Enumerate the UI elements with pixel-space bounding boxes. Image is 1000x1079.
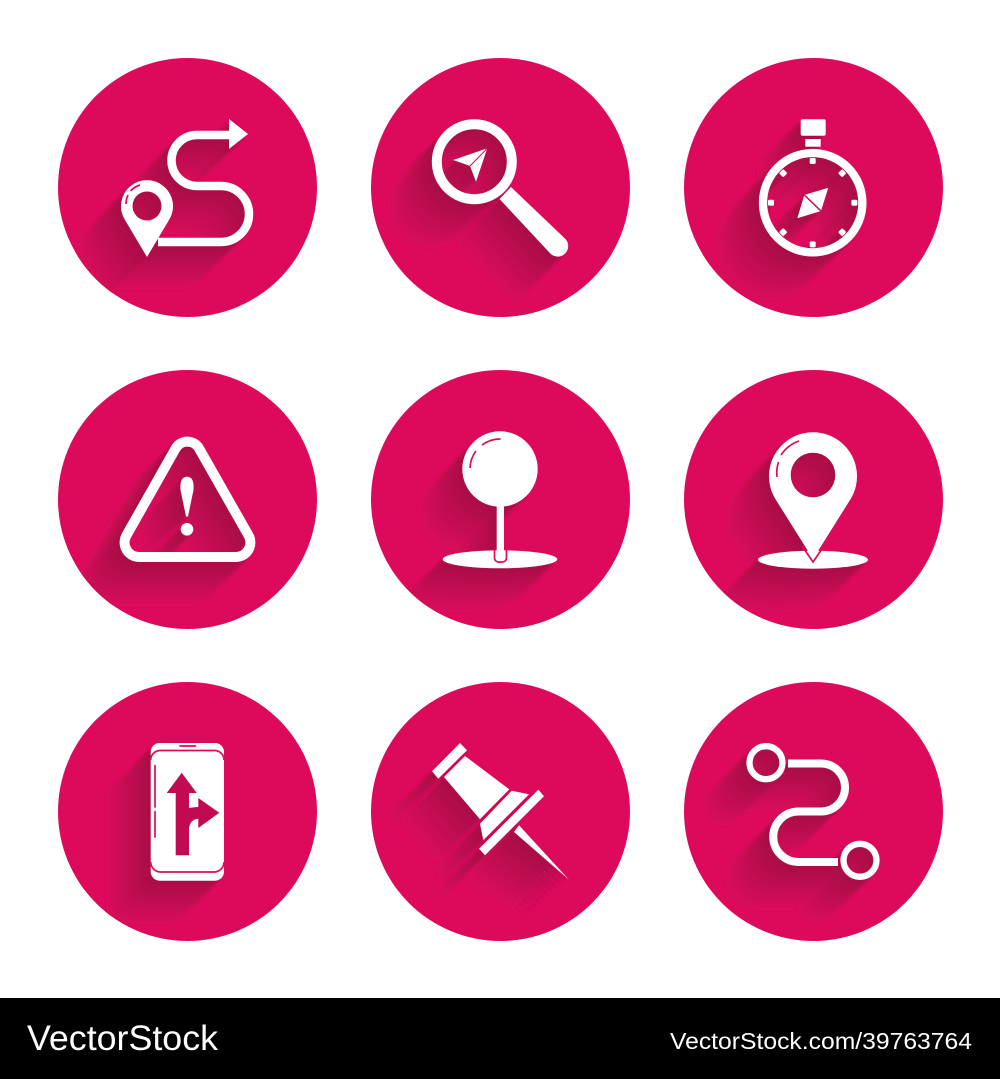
long shadow: compass <box>719 123 858 296</box>
icon: location marker on ellipse <box>758 432 868 569</box>
circle background: route <box>58 58 317 317</box>
panel: route between two points <box>684 682 943 941</box>
long shadow: thumbtack <box>394 746 566 906</box>
circle background: phone <box>58 682 317 941</box>
long shadow: round pin <box>399 435 553 612</box>
long shadow: warning <box>81 446 246 601</box>
circle background: two-point route <box>684 682 943 941</box>
icon: compass <box>763 119 862 252</box>
panel: thumbtack <box>371 682 630 941</box>
panel: warning triangle <box>58 370 317 629</box>
footer logo text: VectorStock <box>27 1019 219 1058</box>
long shadow: location <box>714 436 864 613</box>
icon: curved route with endpoints <box>750 746 876 877</box>
long shadow: magnifier <box>393 128 564 301</box>
circle background: compass <box>684 58 943 317</box>
panel: winding route with location pin <box>58 58 317 317</box>
icon: thumbtack <box>432 743 569 880</box>
long shadow: route <box>77 123 245 301</box>
panel: magnifying glass with navigation arrow <box>371 58 630 317</box>
panel: compass <box>684 58 943 317</box>
icon: round pin on ellipse <box>443 431 557 568</box>
panel: round push pin <box>371 370 630 629</box>
footer bar <box>0 998 1000 1079</box>
circle background: thumbtack <box>371 682 630 941</box>
icon: route arrow and pin <box>121 119 249 257</box>
icon: smartphone <box>151 743 224 881</box>
circle background: warning <box>58 370 317 629</box>
circle background: location <box>684 370 943 629</box>
icon: magnifying glass <box>437 124 568 257</box>
footer image reference: VectorStock.com/39763764 <box>670 1028 972 1054</box>
panel: location marker <box>684 370 943 629</box>
circle background: round pin <box>371 370 630 629</box>
circle background: magnifier <box>371 58 630 317</box>
panel: smartphone with road directions <box>58 682 317 941</box>
long shadow: two-point route <box>706 750 872 921</box>
icon: warning triangle with exclamation mark <box>125 442 250 557</box>
long shadow: phone <box>107 747 220 925</box>
